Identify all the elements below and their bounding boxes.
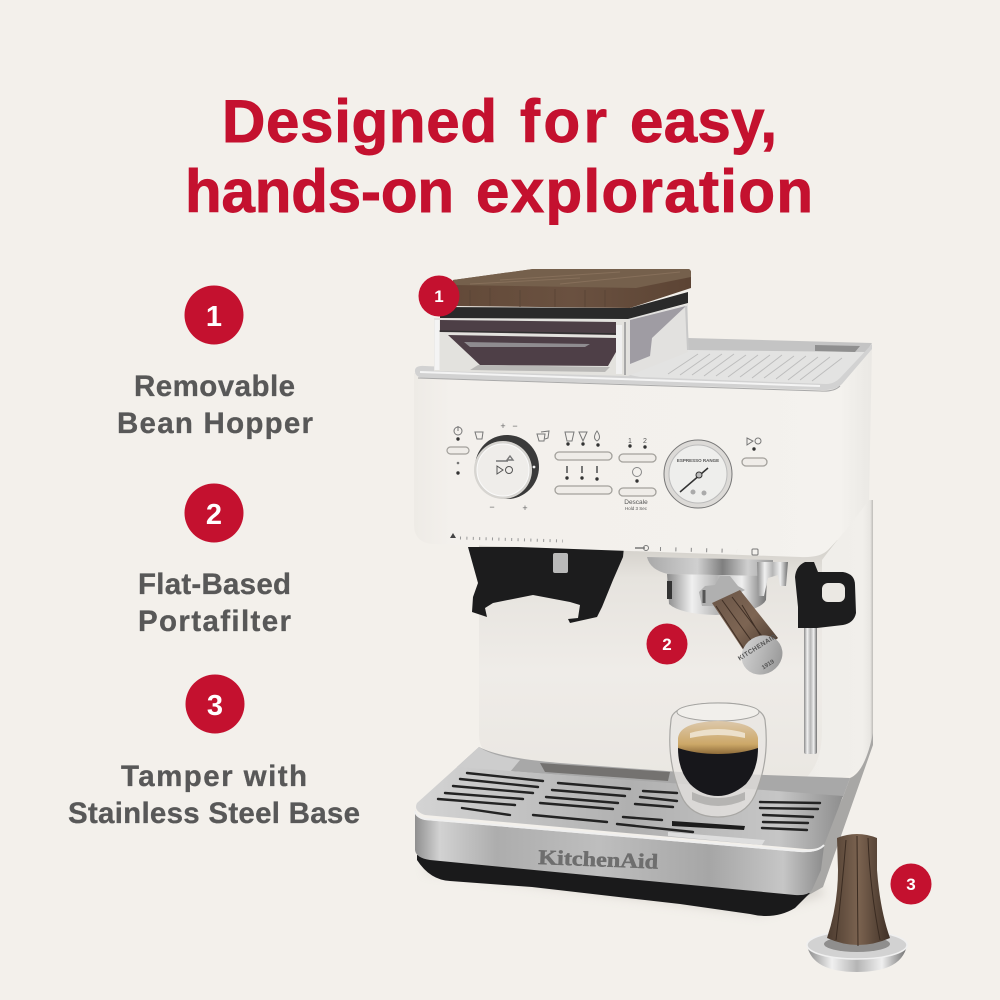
control panel: +: [522, 503, 528, 513]
middle icons and dots: [565, 431, 600, 473]
control panel: [447, 421, 767, 555]
tray front band: [415, 810, 824, 895]
long buttons: [555, 452, 767, 496]
feature 2 label: [138, 568, 292, 638]
number badge 3: [186, 674, 244, 734]
title: exploration: [476, 158, 813, 225]
machine front panel: [414, 346, 872, 557]
black gasket: [440, 292, 688, 319]
chrome group head: [647, 557, 773, 576]
grip opening: [822, 583, 845, 602]
number badge 2: [184, 484, 244, 542]
title: for: [520, 88, 607, 155]
callout badge 1: [418, 276, 460, 316]
left button: [447, 447, 469, 454]
tamper base: [807, 945, 907, 972]
feature 2 label: Portafilter: [138, 605, 292, 638]
hopper front glass: [434, 318, 628, 376]
number badge 3: 3: [207, 690, 223, 722]
tray back strip: [457, 747, 850, 797]
title: [185, 88, 813, 225]
wooden handle: [712, 590, 778, 660]
callout badge 1: 1: [434, 287, 444, 306]
title: Designed: [222, 88, 497, 155]
glass shell: [670, 703, 766, 817]
feature 1 label: Bean Hopper: [117, 407, 314, 440]
right side panel: [806, 500, 873, 778]
cradle chrome clip: [553, 553, 568, 573]
group head and portafilter: [647, 557, 791, 683]
hopper rear glass: [628, 304, 688, 376]
lock scale: [635, 547, 645, 549]
ground shadow: [425, 858, 825, 915]
callout badge 2: 2: [662, 635, 672, 654]
handle end cap: KITCHENAID: [737, 633, 778, 662]
top body: [414, 338, 872, 557]
control panel: −: [489, 502, 495, 512]
descale label: Hold 3 Sec: [625, 506, 648, 511]
feature 2 label: Flat-Based: [138, 568, 291, 601]
top grill: [628, 341, 872, 388]
KitchenAid logo: KitchenAid: [538, 845, 659, 874]
wooden lid: [453, 269, 691, 308]
pressure gauge: ESPRESSO RANGE: [677, 458, 719, 463]
descale label: [624, 499, 648, 511]
steam wand black grip: [795, 562, 856, 628]
black base and feet: [417, 855, 810, 916]
control panel: −: [512, 421, 518, 431]
callout badge 2: [646, 624, 688, 664]
number badge 1: 1: [206, 301, 222, 333]
coffee beans: [440, 320, 616, 335]
removable bean hopper: [434, 269, 691, 376]
tray grate slots: [438, 773, 820, 832]
feature 1 label: Removable: [134, 370, 295, 403]
chrome spouts: [757, 562, 788, 596]
grill rear rail: [688, 338, 872, 352]
steam wand: [795, 562, 856, 754]
descale label: Descale: [624, 499, 648, 506]
lid top face: [453, 269, 691, 288]
feature 1: removable bean hopper: [117, 286, 314, 440]
feature 3 label: Tamper with: [121, 760, 307, 793]
tray right side: [807, 733, 873, 896]
drip tray: [415, 733, 873, 916]
left power and cup icons: [454, 426, 549, 441]
crema: [678, 721, 758, 754]
left black grinder cradle: [468, 547, 624, 623]
feature 3 label: Stainless Steel Base: [68, 797, 360, 830]
hopper glass posts: [434, 320, 440, 370]
handle end cap: [733, 627, 791, 683]
handle end cap: 1919: [761, 659, 776, 671]
feature list: [68, 286, 360, 830]
lower body wall: [479, 540, 873, 778]
coffee machine: [414, 269, 907, 972]
pressure gauge: [664, 440, 732, 508]
control panel: +: [500, 421, 506, 431]
tray top plate: [416, 767, 843, 849]
feature 3 label: [68, 760, 360, 830]
callout badge 3: 3: [906, 875, 916, 894]
portafilter joint: [699, 576, 745, 606]
tamper wooden handle: [827, 834, 890, 945]
number badge 1: [184, 286, 244, 344]
callout badge 3: [890, 864, 932, 904]
portafilter basket: [667, 574, 767, 615]
feature 1 label: [117, 370, 314, 440]
start stop icon: [747, 438, 753, 445]
number badge 2: 2: [206, 499, 222, 531]
selector dial: [474, 435, 539, 499]
title: easy,: [630, 88, 777, 155]
title: hands-on: [185, 158, 454, 225]
tamper: [807, 834, 907, 972]
grind scale: [460, 538, 563, 541]
espresso cup: [670, 703, 766, 817]
control panel: 1: [628, 438, 632, 445]
control panel: 2: [643, 438, 647, 445]
feature 3: tamper: [68, 674, 360, 830]
chrome top band: [415, 344, 872, 390]
feature 2: flat-based portafilter: [138, 484, 292, 638]
espresso: [678, 748, 758, 796]
